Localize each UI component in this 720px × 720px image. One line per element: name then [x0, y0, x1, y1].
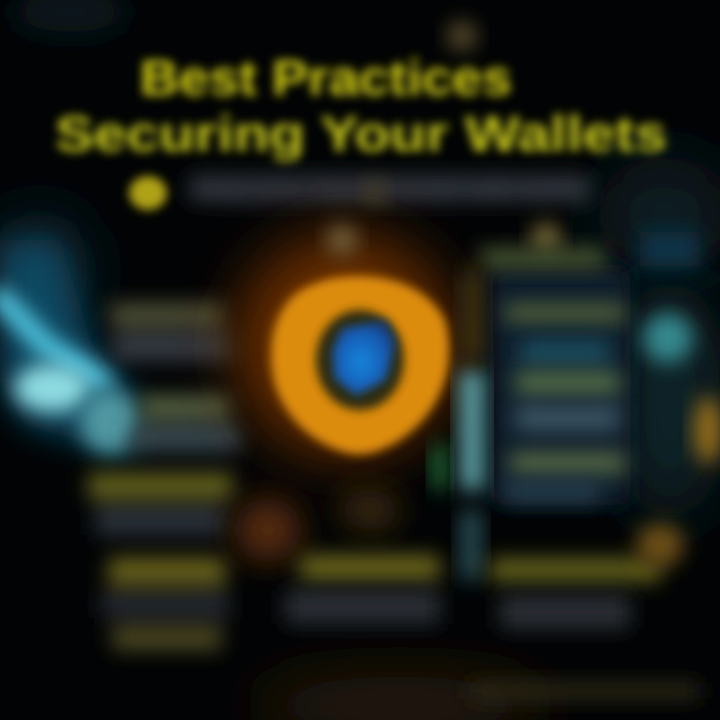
list item 4: [108, 558, 226, 584]
list item 3: [88, 473, 233, 499]
title: [55, 50, 667, 162]
phone row 1: [505, 303, 625, 323]
ring inner dark: [316, 310, 404, 410]
icon: lightning streak: [0, 240, 140, 455]
icon: right teal tile: [643, 313, 693, 363]
title line 2: Securing Your Wallets: [55, 106, 667, 162]
orange ring: [271, 276, 449, 454]
left column text list: [88, 303, 240, 650]
list item 2: [140, 395, 230, 419]
icon: small ornament under subtitle: [364, 181, 386, 203]
icon: blue shield: [332, 320, 396, 396]
subtitle text: Keep your digital assets safe online: [190, 174, 590, 204]
icon: badge pin: [327, 225, 357, 255]
shield badge: [235, 225, 455, 457]
badge glow: [235, 233, 455, 457]
icon: subtitle bullet: [129, 176, 167, 210]
icon: amber corner: [636, 523, 684, 567]
phone body: [490, 265, 630, 505]
bottom heading right: [490, 558, 660, 582]
list item 1: [110, 303, 225, 327]
bottom text center: [285, 590, 440, 624]
icon: right edge amber: [694, 396, 720, 464]
phone panel: [480, 248, 630, 505]
phone heading: [480, 248, 605, 268]
subtitle with bullet: [129, 174, 590, 210]
phone row 3: [510, 452, 625, 474]
amber glow: [234, 498, 302, 562]
bottom center cluster: [234, 490, 440, 624]
title line 1: Best Practices: [140, 50, 512, 106]
footer text: [470, 682, 700, 700]
icon: vertical light beam: [432, 270, 484, 580]
icon: upper-right tile: [640, 232, 700, 266]
icon: right ornament: [531, 223, 561, 253]
icon: top ornament: [447, 21, 477, 51]
bottom heading center: [300, 555, 440, 581]
bottom right cluster: [490, 523, 684, 629]
phone row 2: [515, 372, 620, 394]
bottom text right: [500, 595, 630, 629]
